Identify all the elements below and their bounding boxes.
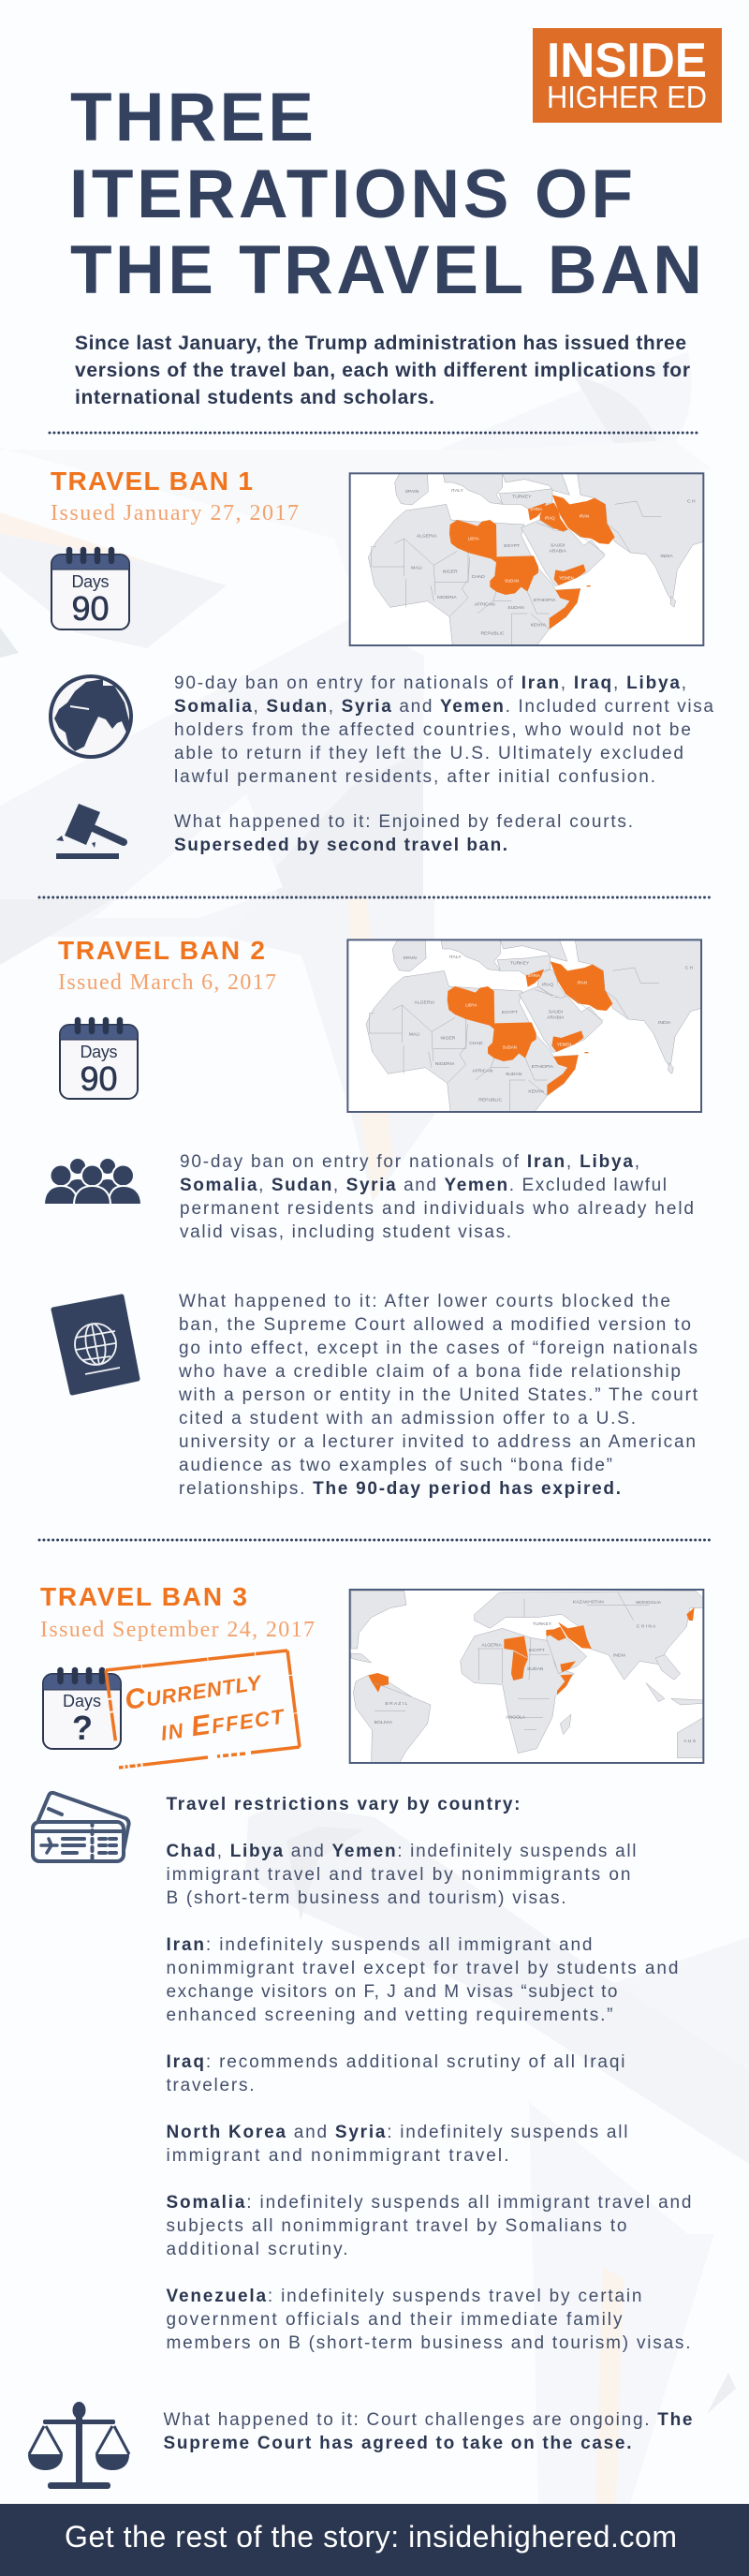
text: Travel Ban 3 restrictions: subjects all nonimmigrant travel by Somalians to: [167, 2216, 627, 2236]
text: Travel Ban 3 restrictions: government officials and their immediate family: [167, 2310, 623, 2330]
map: Travel Ban 1: TURKEY: [512, 495, 532, 500]
text: what happened to Travel Ban 2: relationships. The 90-day period has expired.: [179, 1479, 621, 1499]
map: Travel Ban 1: INDIA: [660, 554, 673, 559]
map: Travel Ban 2: KENYA: [528, 1089, 545, 1095]
text: Travel Ban 1 description: lawful permanent residents, after initial confusion.: [174, 767, 655, 787]
stamp: currently in effect: IN EFFECT: [158, 1699, 286, 1747]
map: Travel Ban 1: IRAQ: [545, 515, 555, 520]
map: Travel Ban 2: NIGER: [440, 1036, 456, 1042]
text: Travel Ban 2 description: permanent residents and individuals who already held: [180, 1199, 694, 1219]
map: Travel Ban 1: SUDAN: [505, 579, 519, 584]
text: Travel Ban 3 restrictions: exchange visitors on F, J and M visas “subject to: [167, 1982, 618, 2002]
icon: airline tickets: [33, 1793, 129, 1861]
map: Travel Ban 1: ETHIOPIA: [534, 598, 556, 603]
text: what happened to Travel Ban 3: What happened to it: Court challenges are ongoing. The: [163, 2410, 692, 2430]
calendar icon: days unknown: [43, 1670, 121, 1749]
text: what happened to Travel Ban 2: with a person or entity in the United States.” The court: [178, 1385, 698, 1405]
map: Travel Ban 2: ETHIOPIA: [532, 1064, 554, 1070]
heading: Travel Ban 1: Issued January 27, 2017: [51, 501, 299, 526]
map: Travel Ban 3: ALGERIA: [481, 1642, 502, 1648]
map: Travel Ban 2: IRAQ: [542, 982, 553, 987]
text: Travel Ban 3 restrictions: immigrant and nonimmigrant travel.: [167, 2146, 509, 2166]
map: Travel Ban 2: LIBYA: [465, 1002, 477, 1007]
map: Travel Ban 2: ITALY: [448, 955, 462, 960]
map: Travel Ban 2: SYRIA: [528, 973, 540, 978]
title: ITERATIONS OF: [69, 156, 633, 232]
stamp: currently in effect: CURRENTLY: [123, 1665, 265, 1716]
title: THREE: [70, 80, 314, 155]
text: what happened to Travel Ban 2: university or a lecturer invited to address an American: [179, 1432, 696, 1452]
map: Travel Ban 2: REPUBLIC: [478, 1098, 503, 1103]
text: Travel Ban 3 restrictions: additional scrutiny.: [167, 2240, 348, 2259]
calendar icon: days unknown: ?: [72, 1709, 93, 1747]
text: Travel Ban 2 description: valid visas, including student visas.: [180, 1222, 511, 1242]
text: Travel Ban 2 description: 90-day ban on entry for nationals of Iran, Libya,: [180, 1152, 639, 1172]
text: Travel Ban 3 restrictions: travelers.: [167, 2076, 255, 2095]
logo: Inside Higher Ed: INSIDE: [547, 34, 707, 88]
title: [69, 80, 702, 308]
text: Travel Ban 3 restrictions: B (short-term business and tourism) visas.: [167, 1888, 565, 1908]
text: Travel Ban 2 description: [180, 1152, 694, 1242]
text: what happened to Travel Ban 2: [178, 1292, 698, 1499]
calendar icon: 90 days: [60, 1020, 138, 1099]
map: Travel Ban 1: C H: [687, 499, 696, 505]
map: Travel Ban 3: MONGOLIA: [636, 1600, 662, 1606]
text: what happened to Travel Ban 2: cited a student with an admission offer to a U.S.: [179, 1409, 636, 1429]
map: Travel Ban 3: A U S: [683, 1739, 697, 1744]
text: Travel Ban 3 restrictions: Travel restrictions vary by country:: [167, 1795, 521, 1814]
heading: Travel Ban 2: Issued March 6, 2017: [58, 970, 276, 995]
text: what happened to Travel Ban 2: who have a credible claim of a bona fide relationship: [178, 1362, 681, 1382]
heading: Travel Ban 2: TRAVEL BAN 2: [58, 936, 265, 965]
map: Travel Ban 2: SPAIN: [403, 955, 417, 961]
heading: Travel Ban 3: TRAVEL BAN 3: [40, 1582, 247, 1611]
map: Travel Ban 1: ARABIA: [550, 549, 566, 555]
map: Travel Ban 1: MALI: [411, 566, 422, 571]
logo: Inside Higher Ed: HIGHER ED: [547, 80, 707, 114]
text: Travel Ban 1 description: able to return if they left the U.S. Ultimately excluded: [174, 744, 683, 763]
map: Travel Ban 3: SUDAN: [527, 1666, 544, 1672]
map: Travel Ban 1: SYRIA: [530, 507, 542, 511]
map: Travel Ban 3: B R A Z I L: [385, 1701, 407, 1707]
calendar icon: days unknown: Days: [63, 1692, 101, 1710]
stamp: currently in effect: [106, 1651, 300, 1768]
footer band: Get the rest of the story: insidehighered.com: [65, 2520, 677, 2554]
text: Travel Ban 1 description: Somalia, Sudan, Syria and Yemen. Included current visa: [174, 697, 713, 717]
map: Travel Ban 3: EGYPT: [529, 1648, 545, 1653]
map: Travel Ban 2: INDIA: [658, 1020, 671, 1026]
map: Travel Ban 1: ALGERIA: [417, 533, 437, 539]
text: Travel Ban 1 description: 90-day ban on entry for nationals of Iran, Iraq, Libya,: [174, 674, 686, 693]
map: Travel Ban 1: LIBYA: [468, 536, 479, 540]
text: Travel Ban 3 restrictions: North Korea and Syria: indefinitely suspends all: [167, 2123, 627, 2142]
title: THE TRAVEL BAN: [70, 232, 702, 308]
map: Travel Ban 1: SAUDI: [551, 542, 565, 548]
map: Travel Ban 2: IRAN: [578, 980, 587, 985]
text: what happened to Travel Ban 2: ban, the Supreme Court allowed a modified version to: [179, 1315, 691, 1335]
footer band: [0, 2504, 749, 2576]
map: Travel Ban 2: NIGERIA: [435, 1061, 455, 1067]
intro text: Since last January, the Trump administration has issued three: [75, 333, 686, 354]
map: Travel Ban 3: C H I N A: [637, 1624, 656, 1630]
map: Travel Ban 3: KAZAKHSTAN: [573, 1600, 604, 1606]
map: Travel Ban 1: SPAIN: [405, 489, 419, 495]
map: Travel Ban 2: C H: [685, 966, 694, 971]
map: Travel Ban 3: [350, 1590, 703, 1763]
icon: gavel: [56, 804, 124, 859]
text: Travel Ban 3 restrictions: members on B (short-term business and tourism) visas.: [167, 2333, 690, 2353]
map: Travel Ban 2: [347, 940, 701, 1112]
text: Travel Ban 1 description: [174, 674, 713, 787]
map: Travel Ban 3: INDIA: [613, 1652, 626, 1658]
map: Travel Ban 2: SUDAN: [503, 1045, 517, 1050]
heading: Travel Ban 1: TRAVEL BAN 1: [51, 466, 253, 496]
heading: Travel Ban 1: [51, 466, 299, 526]
text: what happened to Travel Ban 3: [163, 2410, 692, 2453]
text: what happened to Travel Ban 2: audience as two examples of such “bona fide”: [179, 1456, 612, 1475]
calendar icon: 90 days: 90: [71, 589, 109, 628]
text: Travel Ban 3 restrictions: immigrant travel and travel by nonimmigrants on: [167, 1865, 631, 1885]
map: Travel Ban 2: CHAD: [469, 1041, 483, 1046]
calendar icon: 90 days: Days: [71, 572, 109, 591]
map: Travel Ban 1: ITALY: [451, 488, 464, 494]
calendar icon: 90 days: 90: [81, 1059, 118, 1098]
calendar icon: 90 days: [51, 550, 129, 629]
text: what happened to Travel Ban 2: What happened to it: After lower courts blocked the: [179, 1292, 670, 1311]
text: Travel Ban 3 restrictions: Somalia: indefinitely suspends all immigrant travel and: [167, 2193, 691, 2213]
text: Travel Ban 3 restrictions: enhanced screening and vetting requirements.”: [167, 2006, 612, 2025]
text: Travel Ban 3 restrictions: Venezuela: indefinitely suspends travel by certain: [167, 2287, 642, 2306]
icon: scales of justice: [28, 2402, 129, 2489]
map: Travel Ban 3: TURKEY: [533, 1621, 552, 1627]
map: Travel Ban 2: YEMEN: [557, 1042, 571, 1046]
map: Travel Ban 2: SUDAN: [506, 1072, 522, 1077]
text: Travel Ban 3 restrictions: Chad, Libya and Yemen: indefinitely suspends all: [167, 1842, 637, 1861]
map: Travel Ban 2: TURKEY: [510, 961, 530, 967]
map: Travel Ban 2: ALGERIA: [415, 999, 435, 1005]
text: Travel Ban 3 restrictions: Iraq: recommends additional scrutiny of all Iraqi: [167, 2052, 625, 2072]
intro text: [75, 333, 690, 408]
map: Travel Ban 1: AFRICAN: [475, 602, 495, 608]
map: Travel Ban 3: ANGOLA: [506, 1714, 526, 1720]
text: what happened to Travel Ban 1: [174, 812, 633, 855]
map: Travel Ban 2: MALI: [409, 1032, 420, 1038]
heading: Travel Ban 3: [40, 1582, 315, 1642]
icon: group of people: [44, 1158, 141, 1205]
icon: passport: [53, 1296, 138, 1393]
text: Travel Ban 2 description: Somalia, Sudan, Syria and Yemen. Excluded lawful: [180, 1176, 667, 1195]
map: Travel Ban 1: CHAD: [472, 574, 485, 580]
map: Travel Ban 1: EGYPT: [504, 543, 520, 549]
text: what happened to Travel Ban 2: go into effect, except in the cases of “foreign nationals: [179, 1339, 698, 1358]
map: Travel Ban 1: YEMEN: [559, 575, 574, 580]
heading: Travel Ban 2: [58, 936, 276, 995]
text: what happened to Travel Ban 3: Supreme Court has agreed to take on the case.: [163, 2434, 631, 2453]
map: Travel Ban 1: NIGER: [443, 570, 458, 575]
text: Travel Ban 3 restrictions: [167, 1795, 691, 2353]
map: Travel Ban 2: SAUDI: [549, 1009, 563, 1014]
map: Travel Ban 3: BOLIVIA: [374, 1720, 393, 1725]
map: Travel Ban 2: EGYPT: [502, 1010, 518, 1015]
map: Travel Ban 1: REPUBLIC: [481, 631, 505, 637]
map: Travel Ban 2: ARABIA: [547, 1015, 565, 1021]
text: Travel Ban 3 restrictions: nonimmigrant travel except for travel by students and: [167, 1959, 678, 1978]
map: Travel Ban 1: [350, 473, 703, 645]
logo: Inside Higher Ed: [533, 28, 722, 123]
intro text: international students and scholars.: [75, 387, 434, 408]
text: Travel Ban 1 description: holders from the affected countries, who would not be: [174, 720, 691, 740]
map: Travel Ban 1: KENYA: [531, 623, 547, 629]
text: Travel Ban 3 restrictions: Iran: indefinitely suspends all immigrant and: [167, 1935, 592, 1955]
map: Travel Ban 1: NIGERIA: [437, 595, 457, 600]
calendar icon: 90 days: Days: [81, 1043, 118, 1061]
map: Travel Ban 2: AFRICAN: [472, 1069, 493, 1074]
text: what happened to Travel Ban 1: What happened to it: Enjoined by federal courts.: [174, 812, 633, 832]
heading: Travel Ban 3: Issued September 24, 2017: [40, 1618, 315, 1642]
icon: globe: [51, 676, 131, 757]
intro text: versions of the travel ban, each with different implications for: [75, 360, 690, 381]
text: what happened to Travel Ban 1: Superseded by second travel ban.: [174, 836, 507, 855]
map: Travel Ban 1: SUDAN: [507, 605, 524, 611]
map: Travel Ban 1: IRAN: [580, 513, 589, 518]
